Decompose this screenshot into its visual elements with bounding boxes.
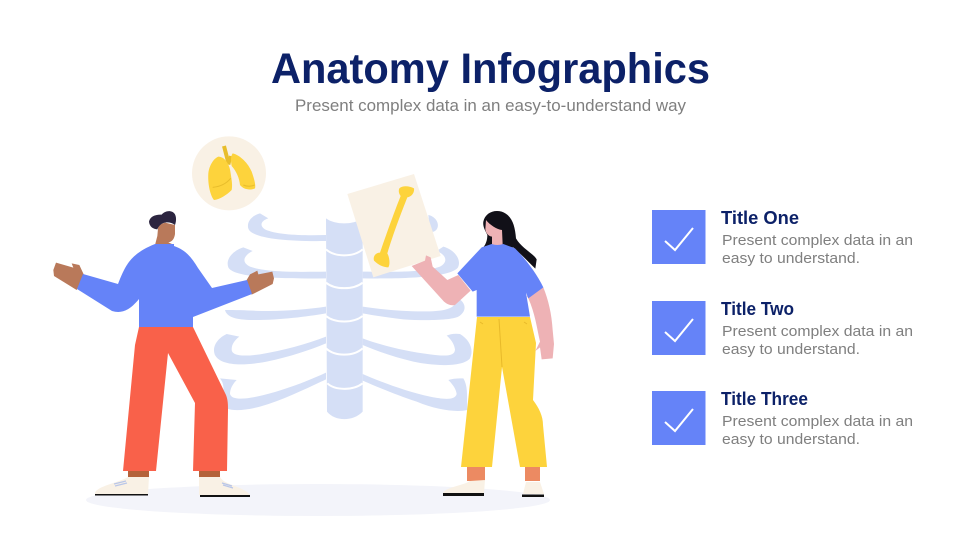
left ribs <box>248 213 326 241</box>
body one: Present complex data in an <box>722 233 913 249</box>
man ankles <box>128 470 220 478</box>
woman face and neck <box>485 220 503 245</box>
list item: two <box>652 299 913 358</box>
woman shoes <box>443 480 544 494</box>
icon: bone <box>374 186 414 267</box>
checkbox three <box>652 391 706 445</box>
woman ankles <box>467 465 540 481</box>
woman shirt <box>457 244 543 317</box>
title: Anatomy Infographics <box>271 45 710 93</box>
card: bone x-ray <box>347 174 441 277</box>
person: man <box>53 211 274 497</box>
body two: easy to understand. <box>722 342 860 358</box>
ground shadow <box>86 484 550 516</box>
list item: three <box>652 389 913 448</box>
woman hair <box>483 211 537 269</box>
subtitle: Present complex data in an easy-to-understand way <box>295 97 687 115</box>
body one <box>722 233 913 267</box>
person: woman <box>412 211 554 497</box>
body two: Present complex data in an <box>722 324 913 340</box>
woman trousers <box>461 317 547 467</box>
man face and neck <box>155 223 175 245</box>
man right hand <box>247 271 274 295</box>
body three: easy to understand. <box>722 432 860 448</box>
man shoes <box>95 477 250 495</box>
spine <box>326 218 363 419</box>
man left hand <box>53 263 84 290</box>
man trousers <box>123 327 228 471</box>
checkbox two <box>652 301 706 355</box>
icon: lungs badge <box>192 136 266 210</box>
body three: Present complex data in an <box>722 414 913 430</box>
checkbox one <box>652 210 706 264</box>
heading two: Title Two <box>721 299 794 319</box>
ribcage <box>214 213 472 419</box>
man hair <box>149 211 176 229</box>
right ribs <box>428 215 438 232</box>
woman raised arm <box>412 255 471 305</box>
list item: one <box>652 208 913 267</box>
body two <box>722 324 913 358</box>
heading three: Title Three <box>721 389 808 409</box>
man jumper <box>77 244 252 327</box>
body one: easy to understand. <box>722 251 860 267</box>
woman right arm <box>527 287 554 359</box>
body three <box>722 414 913 448</box>
heading one: Title One <box>721 208 799 228</box>
